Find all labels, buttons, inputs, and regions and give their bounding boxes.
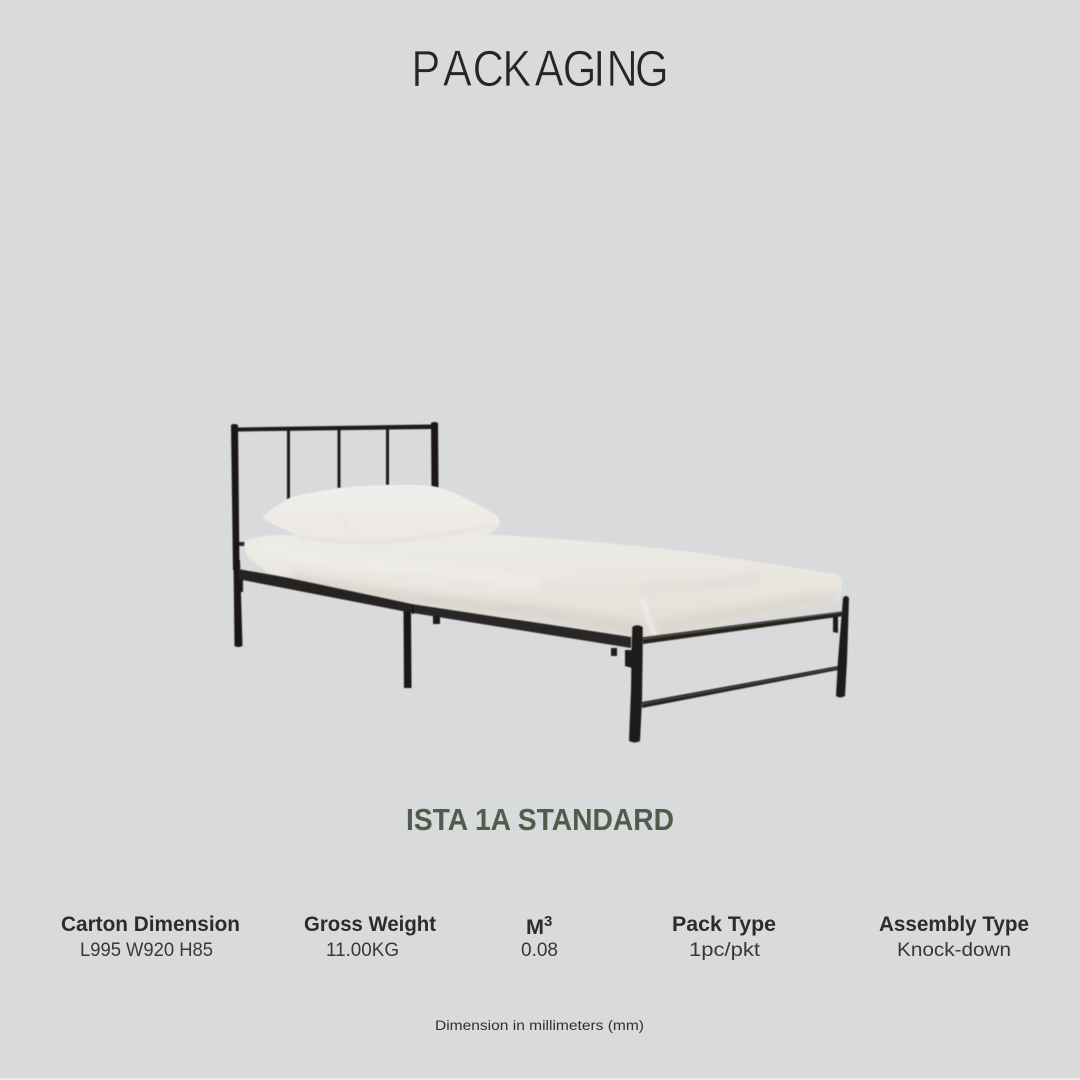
spec: cubic metres: 3 bbox=[544, 913, 552, 930]
spec: gross weight bbox=[304, 913, 436, 961]
spec: cubic metres: 0.08 bbox=[521, 940, 558, 961]
spec: carton dimension: L995 W920 H85 bbox=[80, 940, 213, 961]
spec: carton dimension: Carton Dimension bbox=[61, 913, 240, 936]
bed: footboard rails bbox=[642, 611, 844, 708]
spec: carton dimension bbox=[61, 913, 240, 961]
spec: pack type: Pack Type bbox=[672, 913, 776, 936]
spec: cubic metres: M bbox=[526, 916, 544, 939]
bed: headboard bbox=[231, 422, 438, 647]
spec: assembly type bbox=[879, 913, 1029, 961]
spec: pack type: 1pc/pkt bbox=[689, 940, 761, 961]
footnote: Dimension in millimeters (mm) bbox=[435, 1018, 644, 1033]
bed illustration bbox=[231, 422, 849, 742]
bed: side rail and near legs bbox=[238, 569, 849, 742]
spec: cubic metres bbox=[521, 913, 558, 961]
spec: gross weight: 11.00KG bbox=[326, 940, 399, 961]
bed: mattress bbox=[244, 535, 842, 638]
spec: pack type bbox=[672, 913, 776, 961]
spec: assembly type: Assembly Type bbox=[879, 913, 1029, 936]
bed: pillow bbox=[262, 485, 500, 543]
bed: far legs and brackets bbox=[237, 575, 838, 668]
title: PACKAGING bbox=[411, 41, 669, 98]
product name: ISTA 1A STANDARD bbox=[406, 802, 674, 837]
spec: gross weight: Gross Weight bbox=[304, 913, 436, 936]
spec: assembly type: Knock-down bbox=[897, 940, 1011, 961]
